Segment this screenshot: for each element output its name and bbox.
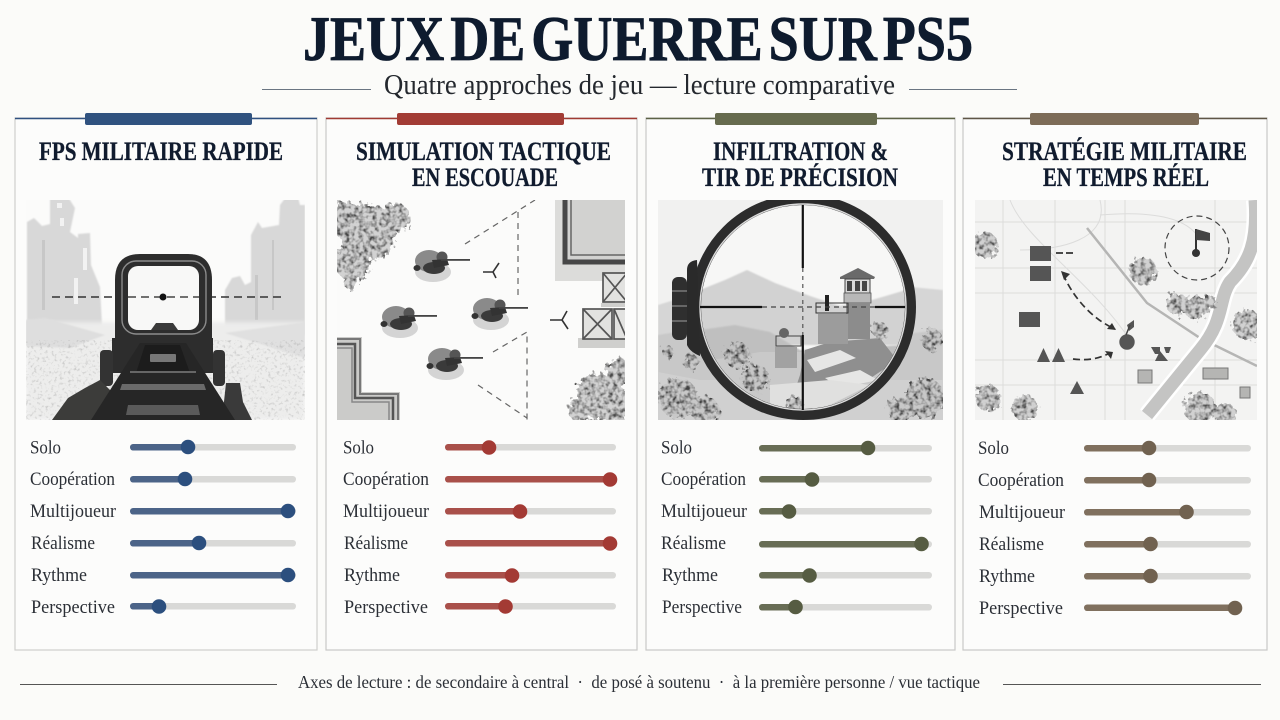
objective circle with flag xyxy=(1165,216,1229,280)
building bottom-left xyxy=(337,337,400,420)
row: Réalisme: Réalisme xyxy=(344,533,408,554)
row: Coopération xyxy=(343,469,617,490)
right hand xyxy=(222,383,252,420)
row: Rythme xyxy=(662,565,932,586)
row: Solo: Solo xyxy=(978,438,1009,459)
sight xyxy=(112,254,213,373)
illustration: squad top-down map xyxy=(327,200,634,423)
row: Réalisme: Réalisme xyxy=(661,533,726,554)
panel: infiltration et tir de précision xyxy=(646,113,955,650)
row: Solo xyxy=(343,438,616,458)
heading: TIR DE PRÉCISION xyxy=(702,163,898,192)
row: Solo: Solo xyxy=(30,438,61,458)
color tab xyxy=(397,113,564,125)
sliders xyxy=(978,438,1251,619)
row: Solo xyxy=(978,438,1251,459)
row: Perspective: Perspective xyxy=(662,597,742,618)
dashed aim line xyxy=(52,296,282,298)
tree top-left xyxy=(327,202,410,289)
row: Coopération xyxy=(978,470,1251,491)
row: Réalisme xyxy=(661,533,932,554)
tree bottom-right xyxy=(566,356,625,420)
heading: FPS MILITAIRE RAPIDE xyxy=(39,137,283,166)
row: Multijoueur: Multijoueur xyxy=(979,502,1066,523)
sliders xyxy=(30,438,296,618)
row: Solo xyxy=(661,438,932,458)
road xyxy=(1087,228,1257,366)
scope lens view xyxy=(702,270,904,409)
row: Perspective xyxy=(662,597,932,618)
crosshair xyxy=(802,205,804,410)
map grid xyxy=(975,200,1257,420)
row: Multijoueur: Multijoueur xyxy=(661,501,748,522)
color tab xyxy=(85,113,252,125)
color tab xyxy=(1030,113,1199,125)
row: Multijoueur xyxy=(30,501,296,522)
row: Multijoueur: Multijoueur xyxy=(30,501,117,522)
sliders xyxy=(661,438,932,618)
row: Multijoueur xyxy=(343,501,616,522)
row: Perspective: Perspective xyxy=(344,597,428,618)
heading: INFILTRATION & xyxy=(713,137,888,166)
crates xyxy=(578,338,625,348)
arrows xyxy=(483,263,568,329)
row: Réalisme: Réalisme xyxy=(979,534,1044,555)
left hand xyxy=(52,380,112,420)
heading xyxy=(356,137,611,192)
units xyxy=(1019,246,1171,394)
row: Rythme xyxy=(979,566,1251,587)
heading xyxy=(702,137,898,192)
panel: simulation tactique en escouade xyxy=(326,113,637,650)
row: Perspective: Perspective xyxy=(979,598,1063,619)
row: Perspective xyxy=(31,597,296,618)
heading: EN TEMPS RÉEL xyxy=(1043,163,1209,192)
row: Coopération xyxy=(30,469,296,490)
turret xyxy=(687,260,700,356)
row: Solo: Solo xyxy=(343,438,374,458)
buildings xyxy=(1138,368,1250,398)
sliders xyxy=(343,438,617,618)
heading xyxy=(1002,137,1247,192)
illustration: tactical map xyxy=(972,200,1262,425)
heading: SIMULATION TACTIQUE xyxy=(356,137,611,166)
row: Rythme: Rythme xyxy=(31,565,87,586)
gun rail xyxy=(91,373,235,420)
dashed field of view xyxy=(465,200,535,420)
row: Réalisme xyxy=(344,533,617,554)
row: Coopération: Coopération xyxy=(343,469,429,490)
row: Rythme: Rythme xyxy=(662,565,718,586)
subtitle: Quatre approches de jeu — lecture comparative xyxy=(384,70,895,101)
illustration: sniper scope on watchtower xyxy=(658,200,945,424)
panel: stratégie militaire en temps réel xyxy=(963,113,1267,650)
row: Perspective xyxy=(979,598,1242,619)
row: Perspective xyxy=(344,597,616,618)
row: Perspective: Perspective xyxy=(31,597,115,618)
row: Réalisme xyxy=(979,534,1251,555)
watchtower xyxy=(775,268,875,368)
row: Réalisme xyxy=(31,533,296,554)
dashed arrows xyxy=(1056,253,1115,360)
row: Rythme: Rythme xyxy=(979,566,1035,587)
title: JEUX DE GUERRE SUR PS5 xyxy=(303,3,973,74)
row: Coopération: Coopération xyxy=(30,469,115,490)
soldiers xyxy=(414,250,470,282)
panel: FPS militaire rapide xyxy=(15,113,317,650)
rubble ground xyxy=(26,322,305,420)
row: Rythme: Rythme xyxy=(344,565,400,586)
heading: EN ESCOUADE xyxy=(412,163,558,192)
row: Solo xyxy=(30,438,296,458)
scope ring xyxy=(696,200,910,414)
forests xyxy=(972,232,1262,425)
row: Solo: Solo xyxy=(661,438,692,458)
illustration: first-person gun sight in ruined city xyxy=(26,185,305,420)
row: Multijoueur xyxy=(661,501,932,522)
building top-right xyxy=(555,200,625,281)
row: Coopération: Coopération xyxy=(661,469,746,490)
row: Rythme xyxy=(344,565,616,586)
row: Réalisme: Réalisme xyxy=(31,533,95,554)
river xyxy=(1147,200,1256,415)
row: Coopération xyxy=(661,469,932,490)
row: Multijoueur: Multijoueur xyxy=(343,501,430,522)
row: Rythme xyxy=(31,565,296,586)
row: Coopération: Coopération xyxy=(978,470,1064,491)
outer landscape xyxy=(658,287,943,336)
row: Multijoueur xyxy=(979,502,1251,523)
color tab xyxy=(715,113,877,125)
footer note: Axes de lecture : de secondaire à central · de posé à soutenu · à la première personne / vue tactique xyxy=(298,672,980,692)
